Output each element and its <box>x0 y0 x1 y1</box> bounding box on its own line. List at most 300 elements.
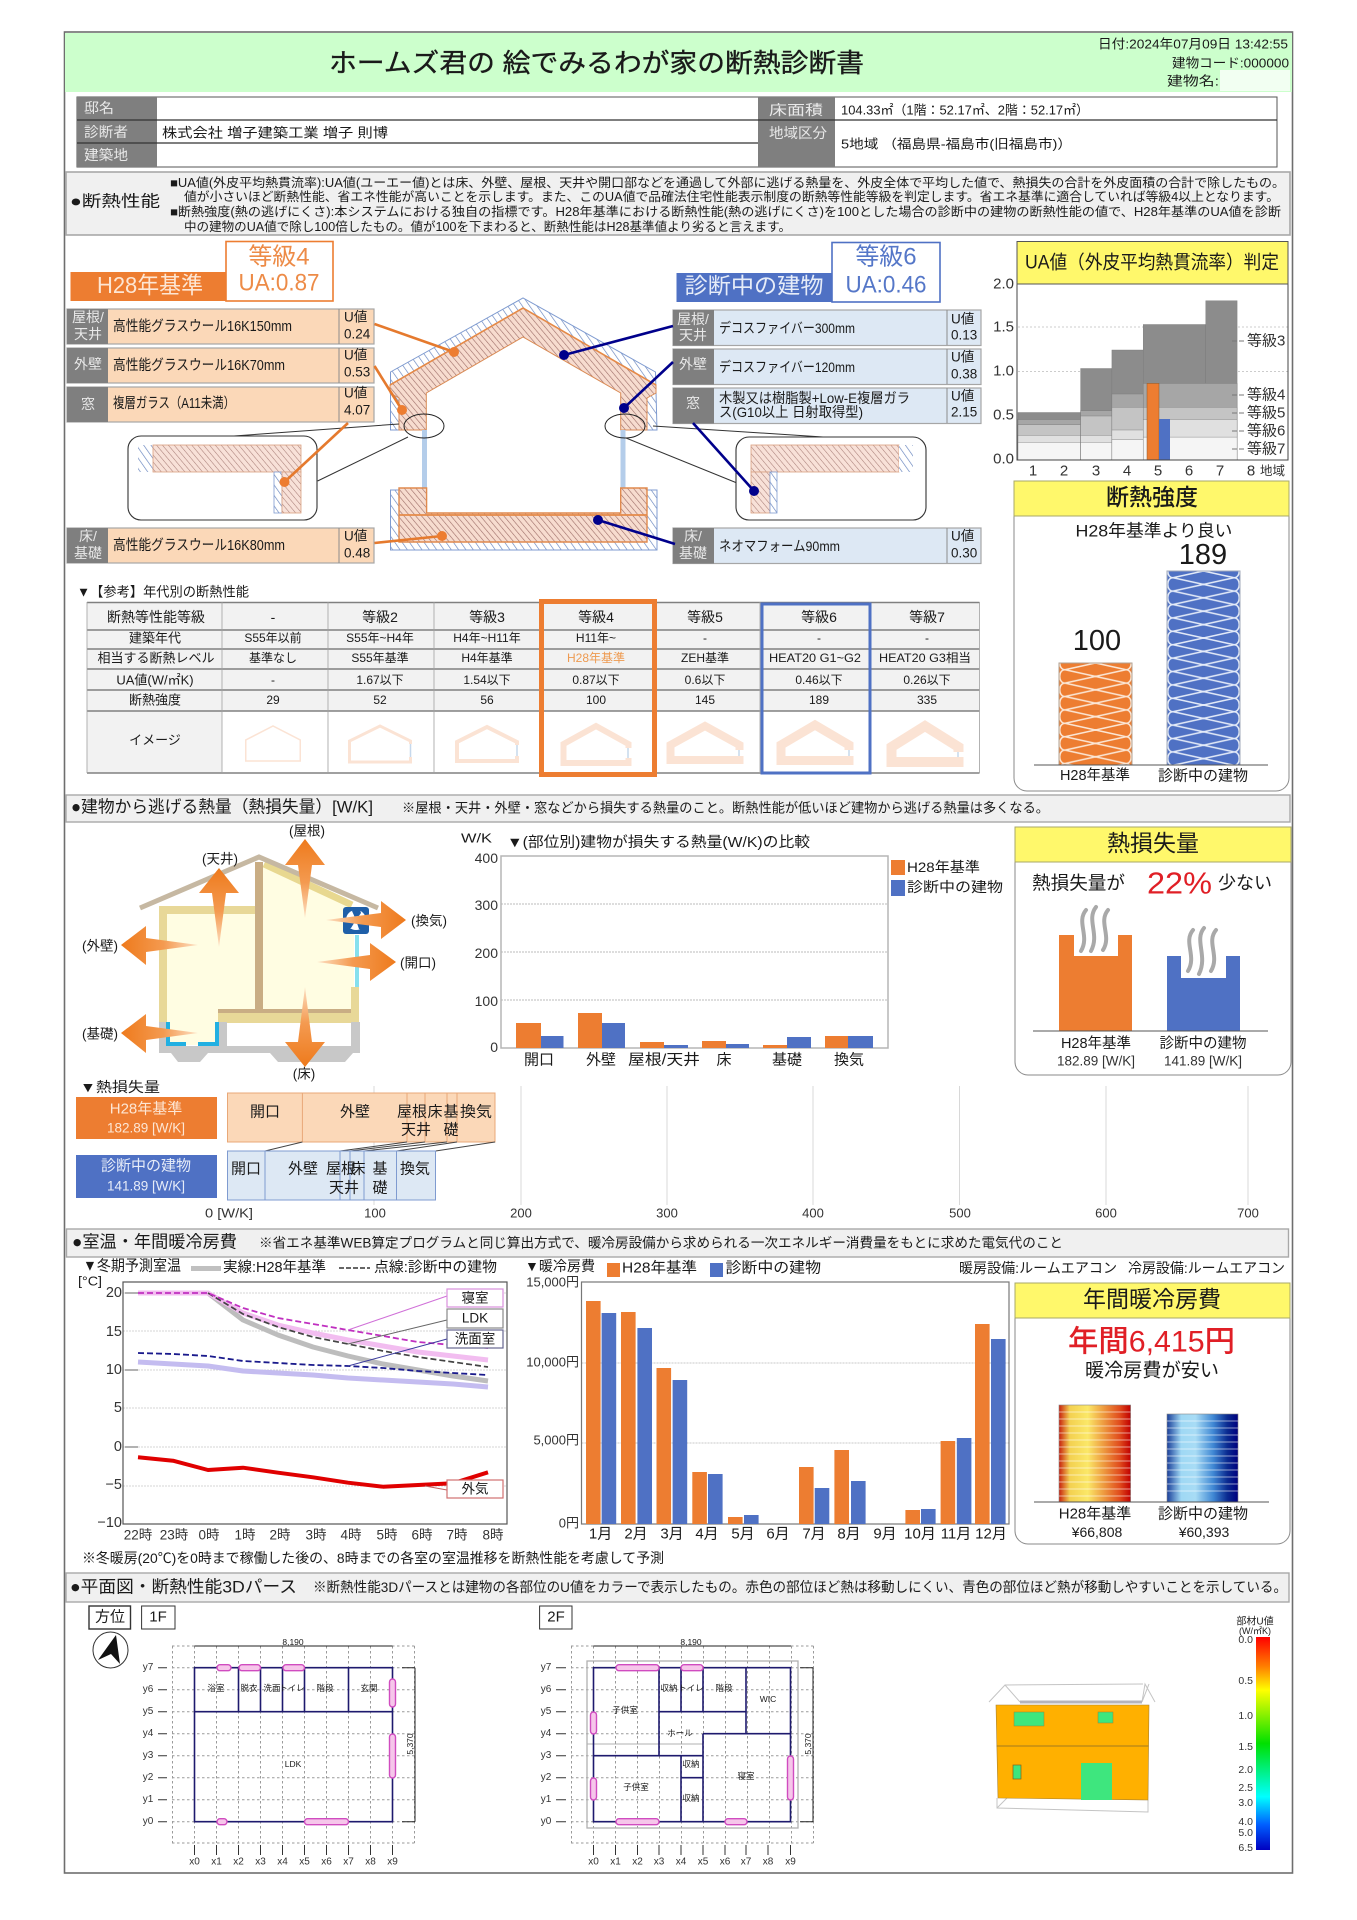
floor plan: 1F: x2 <box>233 1856 244 1868</box>
callout: left eave detail <box>128 414 444 520</box>
stack: diagnosed: 開口 <box>231 1160 261 1178</box>
spec rows: H28 standard: U値 <box>344 528 367 544</box>
floor plan: 1F: 1F <box>149 1608 167 1626</box>
bar chart: monthly heating and cooling cost: 2月 <box>624 1526 648 1542</box>
label: H28: H28年基準 <box>110 1100 182 1118</box>
stack: H28: 礎 <box>443 1122 459 1138</box>
arrow labels: (開口) <box>400 956 436 970</box>
label: diagnosed: 診断中の建物 <box>101 1158 191 1174</box>
spec rows: diagnosed building: 屋根/ <box>677 311 709 327</box>
table text: 等級3 <box>469 609 505 625</box>
axis labels: 0 [W/K] <box>205 1206 253 1220</box>
arrow labels: (床) <box>293 1066 315 1082</box>
floor plan: 1F: y1 <box>143 1794 154 1805</box>
bar chart: heat loss by part: 200 <box>475 945 498 961</box>
bar chart: monthly heating and cooling cost: 0円 <box>559 1516 579 1530</box>
line chart: winter room temperature: 2時 <box>269 1528 291 1542</box>
color scale legend: 2.0 <box>1238 1764 1253 1776</box>
highlight: grade 4 column <box>542 602 654 774</box>
arrow labels: (天井) <box>202 852 238 866</box>
info table: 邸名 <box>84 100 114 116</box>
bar chart: monthly heating and cooling cost: 10,000円 <box>526 1354 579 1370</box>
reference table: insulation by era: 断熱強度 <box>129 692 181 708</box>
color scale legend: 0.5 <box>1238 1675 1253 1687</box>
bar chart: monthly heating and cooling cost: 1月 <box>589 1526 612 1542</box>
spec rows: H28 standard: 0.24 <box>344 326 371 342</box>
floor plan: 2F: y2 <box>541 1772 552 1783</box>
axis labels: 200 <box>510 1206 532 1220</box>
color scale legend: (W/㎡K) <box>1239 1626 1271 1636</box>
icon: ventilation fan <box>343 907 369 934</box>
floor plan: 2F: 8,190 <box>680 1637 702 1647</box>
axis and grade labels: 0.5 <box>993 406 1014 424</box>
line chart: winter room temperature: 実線:H28年基準 <box>223 1259 326 1276</box>
color scale legend: 5.0 <box>1238 1827 1253 1839</box>
explanation text: ■断熱強度(熱の逃げにくさ):本システムにおける独自の指標です。H28年基準における断熱性能(熱の逃げにくさ)を100とした場合の診断中の建物の断熱性能の値で、H28年基準のUA値を診断 <box>170 204 1282 219</box>
bars <box>586 1301 990 1524</box>
spec rows: H28 standard: 窓 <box>81 396 95 412</box>
explanation text: ■UA値(外皮平均熱貫流率):UA値(ユーエー値)とは床、外壁、屋根、天井や開口部などを通過して外部に逃げる熱量を、外皮全体で平均した値で、熱損失の合計を外皮面積の合計で除したもの。 <box>170 175 1285 190</box>
axis and grade labels <box>993 276 1285 480</box>
bar chart: monthly heating and cooling cost: 暖房設備:ルームエアコン <box>959 1260 1117 1276</box>
section: heat loss heading <box>66 795 1290 822</box>
axis and grade labels: 等級4 <box>1247 386 1285 404</box>
axis and grade labels: 3 <box>1092 462 1100 480</box>
floor plan: 2F <box>540 1606 814 1868</box>
series labels: 洗面室 <box>455 1332 495 1346</box>
reference table: insulation by era: 56 <box>480 693 494 707</box>
panel: heat loss summary: 熱損失量が <box>1032 872 1125 894</box>
line chart: winter room temperature: 1時 <box>234 1528 256 1542</box>
table text: 等級5 <box>687 609 723 625</box>
legend: 診断中の建物 <box>726 1260 821 1276</box>
axis labels: 700 <box>1237 1206 1259 1220</box>
bar chart: monthly heating and cooling cost: 5,000円 <box>533 1432 579 1448</box>
stack: diagnosed: 換気 <box>400 1160 430 1178</box>
line chart: winter room temperature: 5 <box>114 1400 122 1416</box>
floor plan: 2F: x8 <box>763 1856 774 1868</box>
bar chart: monthly heating and cooling cost: 11月 <box>941 1526 971 1542</box>
floor plan: 2F: y1 <box>541 1794 552 1805</box>
header band <box>65 33 1292 92</box>
table text: 等級6 <box>801 609 837 625</box>
date and building meta: 建物コード:000000 <box>1172 56 1289 70</box>
color scale legend: 1.5 <box>1238 1741 1253 1753</box>
floor plan: 2F: 子供室 <box>623 1782 649 1792</box>
date and building meta: 建物名: <box>1167 74 1219 88</box>
floor plan: 1F: y7 <box>143 1662 154 1673</box>
floor plan: 1F: x8 <box>365 1856 376 1868</box>
badge: H28 standard grade: UA:0.87 <box>238 270 320 296</box>
title: ホームズ君の 絵でみるわが家の断熱診断書 <box>329 48 864 78</box>
panel: insulation strength: H28年基準 <box>1060 767 1130 784</box>
reference table: insulation by era: 335 <box>917 693 937 707</box>
bar chart: heat loss by part <box>461 830 1003 1068</box>
reference table: insulation by era: H11年~ <box>576 631 616 645</box>
line chart: winter room temperature: −5 <box>105 1477 122 1493</box>
floor plan: 1F: 浴室 <box>207 1683 225 1693</box>
label: diagnosed <box>76 1155 217 1198</box>
axis and grade labels: 等級3 <box>1247 332 1285 350</box>
bar chart: monthly heating and cooling cost: 4月 <box>695 1526 719 1542</box>
panel: annual heating and cooling cost: ¥60,393 <box>1178 1524 1230 1540</box>
stack: H28 <box>228 1093 495 1142</box>
line chart: winter room temperature: ※冬暖房(20℃)を0時まで稼働した後の、8時までの各室の室温推移を断熱性能を考慮して予測 <box>82 1550 664 1566</box>
stack: H28: 屋根 <box>397 1104 427 1120</box>
color scale legend: 部材U値 <box>1236 1614 1274 1628</box>
badge: diagnosed building grade: 診断中の建物 <box>684 274 824 298</box>
spec rows: H28 standard: 高性能グラスウール16K80mm <box>113 537 285 554</box>
reference table: insulation by era: ▼【参考】年代別の断熱性能 <box>77 584 249 600</box>
panel: insulation strength: 診断中の建物 <box>1158 768 1248 784</box>
panel: heat loss summary: H28年基準 <box>1061 1035 1131 1052</box>
label: diagnosed: 141.89 [W/K] <box>107 1178 185 1194</box>
panel header <box>1017 242 1288 284</box>
bar chart: heat loss by part: 屋根/天井 <box>628 1052 700 1068</box>
reference table: insulation by era: UA値(W/㎡K) <box>116 672 194 688</box>
reference table: insulation by era: H4年~H11年 <box>453 631 521 645</box>
reference table: insulation by era: 100 <box>586 693 606 707</box>
floor plan: 2F: x7 <box>741 1856 752 1868</box>
legend: H28年基準 <box>622 1260 697 1276</box>
bar chart: monthly heating and cooling cost: 冷房設備:ルームエアコン <box>1128 1260 1285 1276</box>
section: room temperature and annual cost heading: ※省エネ基準WEB算定プログラムと同じ算出方式で、暖冷房設備から求められる一次エネルギー消費量をもとに求めた電気代のこと <box>259 1234 1063 1250</box>
color scale legend: 4.0 <box>1238 1816 1253 1828</box>
spec rows: diagnosed building: U値 <box>951 312 974 326</box>
arrow labels: (屋根) <box>289 824 325 838</box>
color scale legend: 6.5 <box>1238 1842 1253 1854</box>
floor plan: 2F: 階段 <box>715 1683 733 1693</box>
legend <box>607 1260 821 1277</box>
reference table: insulation by era: 189 <box>809 693 829 707</box>
label: H28: 182.89 [W/K] <box>107 1120 185 1136</box>
panel: heat loss summary: 少ない <box>1218 873 1272 893</box>
spec rows: diagnosed building <box>673 310 981 564</box>
reference table: insulation by era: - <box>925 631 929 645</box>
reference table: insulation by era: S55年~H4年 <box>346 631 414 645</box>
house cross-section diagram <box>390 298 657 550</box>
line chart: winter room temperature: 4時 <box>340 1528 362 1542</box>
line chart: winter room temperature: 22時 <box>124 1528 153 1542</box>
panel: heat loss summary: 熱損失量 <box>1107 830 1199 856</box>
floor plan: 2F: x3 <box>654 1856 665 1868</box>
floor plan: 2F: y0 <box>541 1816 552 1827</box>
spec rows: H28 standard: 屋根/ <box>72 309 104 325</box>
floor plan: 2F: x0 <box>588 1856 599 1868</box>
spec rows: diagnosed building: U値 <box>951 528 974 544</box>
panel: annual heating and cooling cost: 診断中の建物 <box>1158 1506 1248 1522</box>
floor plan: 1F: 玄関 <box>360 1683 378 1693</box>
series lines <box>138 1293 488 1487</box>
reference table: insulation by era: HEAT20 G3相当 <box>879 651 971 665</box>
3D perspective of house <box>989 1684 1155 1812</box>
leader lines: diagnosed building <box>559 326 759 544</box>
line chart: winter room temperature: 10 <box>106 1362 122 1378</box>
axis and grade labels: 等級5 <box>1247 404 1285 422</box>
axis and grade labels: 等級6 <box>1247 422 1285 440</box>
bar chart: heat loss by part: 外壁 <box>586 1052 616 1068</box>
series labels: LDK <box>462 1310 488 1326</box>
floor plan: 1F: x0 <box>189 1856 200 1868</box>
bar chart: heat loss by part: 0 <box>490 1039 498 1055</box>
floor plan: 2F: y4 <box>541 1728 552 1739</box>
section: floor plan and 3D heading: ※断熱性能3Dパースとは建物の各部位のU値をカラーで表示したもの。赤色の部位ほど熱は移動しにくい、青色の部位ほど熱が移動しやすいことを示している。 <box>313 1579 1287 1595</box>
house thumbnails <box>246 725 958 763</box>
bar chart: monthly heating and cooling cost: 12月 <box>975 1526 1007 1542</box>
illustration: heat escaping from house <box>82 824 447 1082</box>
connectors <box>265 1142 495 1151</box>
stacked bars: heat loss breakdown: ▼熱損失量 <box>80 1079 160 1095</box>
explanation text: 値が小さいほど断熱性能、省エネ性能が高いことを示します。また、このUA値で品確法住宅性能表示制度の断熱等性能等級を判定します。省エネ基準に適合していれば等級4以上となります。 <box>184 189 1279 204</box>
section: insulation performance heading and explanation: ●断熱性能 <box>70 192 160 210</box>
reference table: insulation by era: 1.67以下 <box>356 673 404 687</box>
callout: right eave detail <box>605 414 926 520</box>
arrow labels: (換気) <box>411 914 447 928</box>
floor plan: 1F: x5 <box>299 1856 310 1868</box>
panel: annual heating and cooling cost: 暖冷房費が安い <box>1085 1360 1219 1382</box>
floor plan: 1F: x7 <box>343 1856 354 1868</box>
bar chart: monthly heating and cooling cost: 9月 <box>873 1526 897 1542</box>
bar chart: heat loss by part: 100 <box>475 993 498 1009</box>
bar: H28 heat loss with steam <box>1059 935 1132 1031</box>
spec rows: diagnosed building: 床/ <box>684 528 702 544</box>
floor plan: 1F: 5,370 <box>405 1733 415 1755</box>
spec rows: H28 standard: 基礎 <box>74 545 102 561</box>
reference table: insulation by era: HEAT20 G1~G2 <box>769 651 861 665</box>
spec rows: H28 standard: 複層ガラス（A11未満） <box>113 395 235 412</box>
reference table: insulation by era: 0.26以下 <box>903 673 951 687</box>
info table: 5地域 （福島県-福島市(旧福島市)） <box>841 136 1072 152</box>
floor plan: 2F: x6 <box>720 1856 731 1868</box>
line chart: winter room temperature: 15 <box>106 1324 122 1340</box>
spec rows: H28 standard: 外壁 <box>74 356 102 372</box>
floor plan: 1F: y5 <box>143 1706 154 1717</box>
bar chart: monthly heating and cooling cost <box>525 1258 1285 1542</box>
axis and grade labels: 1.0 <box>993 362 1014 380</box>
floor plan: 2F: y5 <box>541 1706 552 1717</box>
panel: UA value judgement chart <box>993 242 1288 480</box>
axis labels: 600 <box>1095 1206 1117 1220</box>
info table: 床面積 <box>769 102 823 118</box>
floor plan: 1F: x9 <box>387 1856 398 1868</box>
floor plan: 1F: 洗面 <box>263 1683 281 1693</box>
reference table: insulation by era: 1.54以下 <box>463 673 511 687</box>
floor plan: 2F: 5,370 <box>803 1733 813 1755</box>
spec rows: diagnosed building: 2.15 <box>951 404 977 420</box>
bar chart: heat loss by part: 300 <box>475 897 498 913</box>
spec rows: diagnosed building: 基礎 <box>679 545 707 561</box>
floor plan: 1F <box>142 1606 415 1868</box>
explanation text <box>170 175 1285 234</box>
reference table: insulation by era: 29 <box>266 693 280 707</box>
floor plan: 1F: トイレ <box>279 1683 305 1693</box>
bar chart: monthly heating and cooling cost: 6月 <box>766 1526 790 1542</box>
reference table: insulation by era: 0.46以下 <box>795 673 843 687</box>
bar chart: monthly heating and cooling cost: 10月 <box>904 1526 936 1542</box>
grade bands <box>1018 301 1237 460</box>
stack: diagnosed <box>228 1151 436 1200</box>
reference table: insulation by era: - <box>703 631 707 645</box>
bars <box>516 1013 848 1048</box>
reference table: insulation by era: 相当する断熱レベル <box>97 650 215 666</box>
color scale legend <box>1236 1614 1274 1854</box>
table text: 断熱等性能等級 <box>107 609 205 625</box>
color scale legend: 1.0 <box>1238 1710 1253 1722</box>
line chart: winter room temperature: 3時 <box>305 1528 327 1542</box>
panel: insulation strength <box>1014 481 1289 791</box>
highlight: grade 6 column <box>762 604 870 773</box>
axis and grade labels: 1 <box>1029 462 1037 480</box>
line chart: winter room temperature: 0 <box>114 1439 122 1455</box>
floor plan: 1F: 脱衣 <box>240 1683 258 1693</box>
axis and grade labels: 7 <box>1216 462 1224 480</box>
section: room temperature and annual cost heading <box>66 1229 1288 1257</box>
spec rows: H28 standard: 0.48 <box>344 546 370 560</box>
bar: orange insulation 100 <box>1059 663 1132 765</box>
bar: diagnosed heat loss with steam <box>1167 956 1240 1031</box>
panel: insulation strength: H28年基準より良い <box>1076 522 1232 540</box>
bar chart: heat loss by part: 400 <box>475 850 498 866</box>
spec rows: H28 standard: 4.07 <box>344 402 370 418</box>
spec rows: diagnosed building: 0.38 <box>951 366 977 382</box>
line chart: winter room temperature: −10 <box>97 1515 122 1531</box>
section: floor plan and 3D heading <box>66 1573 1289 1602</box>
floor plan: 1F: y3 <box>143 1750 154 1761</box>
floor plan: 2F: 収納 <box>682 1793 700 1803</box>
spec rows: diagnosed building: 0.30 <box>951 546 977 560</box>
reference table: insulation by era: 建築年代 <box>129 630 181 646</box>
stack: H28: 換気 <box>460 1104 492 1120</box>
panel: heat loss summary: 141.89 [W/K] <box>1164 1054 1242 1068</box>
bar chart: monthly heating and cooling cost: 3月 <box>660 1526 684 1542</box>
stack: diagnosed: 基 <box>372 1160 388 1178</box>
info table: 株式会社 増子建築工業 増子 則博 <box>162 126 389 140</box>
legend <box>891 859 1003 896</box>
floor plan: 1F: x3 <box>255 1856 266 1868</box>
reference table: insulation by era: H4年基準 <box>461 650 513 665</box>
line chart: winter room temperature: 7時 <box>446 1528 468 1542</box>
spec rows: diagnosed building: デコスファイバー300mm <box>719 320 855 336</box>
bar chart: heat loss by part: W/K <box>461 830 492 846</box>
legend: 診断中の建物 <box>907 879 1003 895</box>
floor plan: 1F: 8,190 <box>282 1637 304 1647</box>
spec rows: H28 standard: 高性能グラスウール16K150mm <box>113 318 292 335</box>
floor plan: 2F: WIC <box>760 1694 776 1704</box>
bar chart: monthly heating and cooling cost: 5月 <box>731 1526 755 1542</box>
bar chart: heat loss by part: 基礎 <box>772 1052 802 1068</box>
floor plan: 2F: ホール <box>667 1728 693 1738</box>
spec rows: diagnosed building: 外壁 <box>679 356 707 372</box>
table text: - <box>271 609 276 625</box>
bar: blue insulation 189 <box>1167 571 1240 765</box>
info table: 建築地 <box>84 147 128 163</box>
bar: diagnosed cost <box>1167 1414 1238 1502</box>
bar chart: heat loss by part: 換気 <box>834 1052 864 1068</box>
axis labels: 100 <box>364 1206 386 1220</box>
series labels: 寝室 <box>462 1290 488 1306</box>
floor plan: 1F: LDK <box>285 1759 302 1769</box>
spec rows: H28 standard: 0.53 <box>344 364 370 380</box>
panel: insulation strength: 断熱強度 <box>1106 484 1198 510</box>
axis and grade labels: 等級7 <box>1247 440 1285 458</box>
line chart: winter room temperature: [°C] <box>78 1274 102 1288</box>
panel: heat loss summary: 診断中の建物 <box>1160 1035 1246 1052</box>
axis and grade labels: 2 <box>1060 462 1068 480</box>
reference table: insulation by era <box>77 584 980 774</box>
line chart: winter room temperature: 20 <box>106 1285 122 1301</box>
line chart: winter room temperature: 23時 <box>160 1528 189 1542</box>
floor plan: 1F: y6 <box>143 1684 154 1695</box>
reference table: insulation by era: H28年基準 <box>567 650 625 665</box>
info table: 診断者 <box>84 124 128 140</box>
date and building meta <box>1098 36 1290 91</box>
reference table: insulation by era: - <box>271 673 275 687</box>
spec rows: H28 standard: U値 <box>344 310 367 324</box>
stack: H28: 床 <box>427 1104 443 1120</box>
axis and grade labels: 地域 <box>1260 464 1285 478</box>
spec rows: H28 standard <box>67 309 374 563</box>
floor plan: 2F: 子供室 <box>612 1705 638 1715</box>
floor plan: 2F: y6 <box>541 1684 552 1695</box>
axis labels: 500 <box>949 1206 971 1220</box>
arrow labels: (基礎) <box>82 1026 118 1042</box>
reference table: insulation by era: ZEH基準 <box>681 650 729 665</box>
floor plan: 2F: y7 <box>541 1662 552 1673</box>
bar chart: heat loss by part: ▼(部位別)建物が損失する熱量(W/K)の比較 <box>507 834 811 851</box>
reference table: insulation by era: - <box>817 631 821 645</box>
panel: annual heating and cooling cost <box>1015 1283 1290 1544</box>
legend: H28年基準 <box>907 859 980 875</box>
axis and grade labels: 1.5 <box>993 318 1014 336</box>
stack: H28: 外壁 <box>340 1104 370 1120</box>
table text: 等級4 <box>578 609 614 625</box>
axis labels <box>205 1206 1259 1220</box>
floor plan: 2F: 2F <box>547 1608 565 1626</box>
panel: annual heating and cooling cost: ¥66,808 <box>1071 1524 1123 1540</box>
reference table: insulation by era: イメージ <box>129 732 181 748</box>
explanation text: 中の建物のUA値で除し100倍したもの。値が100を下まわると、断熱性能はH28基準値より劣ると言えます。 <box>184 219 791 234</box>
spec rows: H28 standard: U値 <box>344 348 367 362</box>
bar chart: monthly heating and cooling cost: 8月 <box>837 1526 861 1542</box>
axis and grade labels: 8 <box>1247 462 1255 480</box>
spec rows: diagnosed building: 0.13 <box>951 328 977 342</box>
badge: H28 standard grade: H28年基準 <box>97 272 203 298</box>
axis and grade labels: 4 <box>1123 462 1131 480</box>
spec rows: diagnosed building: 天井 <box>679 327 707 343</box>
badge: H28 standard grade: 等級4 <box>248 244 310 270</box>
line chart: winter room temperature: 8時 <box>482 1528 504 1542</box>
axis labels: 300 <box>656 1206 678 1220</box>
badge: diagnosed building grade: UA:0.46 <box>846 272 926 298</box>
spec rows: diagnosed building: U値 <box>951 388 974 404</box>
axis labels: 400 <box>802 1206 824 1220</box>
floor plan: 2F: x4 <box>676 1856 687 1868</box>
axis and grade labels: 6 <box>1185 462 1193 480</box>
reference table: insulation by era: 145 <box>695 693 715 707</box>
panel: heat loss summary <box>1015 827 1291 1075</box>
arrow labels <box>82 824 447 1082</box>
stack: H28: 基 <box>443 1104 459 1120</box>
floor plan: 1F: y0 <box>143 1816 154 1827</box>
floor plan: 2F: y3 <box>541 1750 552 1761</box>
floor plan: 1F: y2 <box>143 1772 154 1783</box>
badge: H28 standard grade <box>70 242 333 301</box>
reference table: insulation by era: S55年基準 <box>351 650 409 665</box>
section: room temperature and annual cost heading: ●室温・年間暖冷房費 <box>72 1232 237 1252</box>
color scale legend: 2.5 <box>1238 1782 1253 1794</box>
series labels <box>348 1289 503 1498</box>
stacked bars: heat loss breakdown <box>76 1079 1259 1220</box>
